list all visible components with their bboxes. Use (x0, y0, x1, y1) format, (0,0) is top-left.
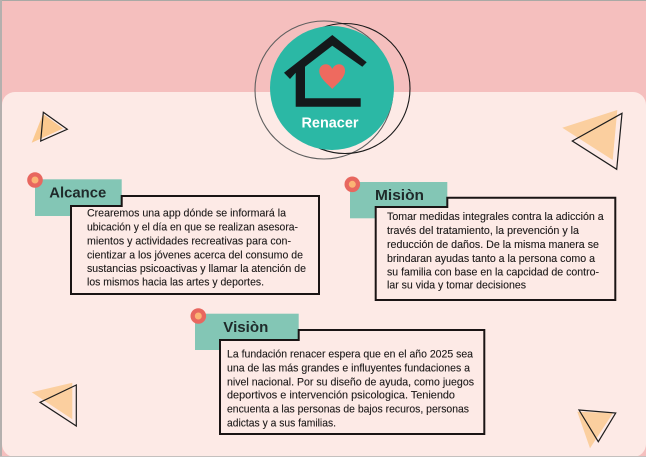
decorative triangle: bottom left (32, 383, 76, 426)
Visiòn body text: adictas y a sus familias. (227, 418, 336, 430)
main content panel (2, 92, 646, 457)
Visiòn text box (220, 330, 484, 434)
Misiòn body text: su familia con base en la capcidad de contro- (387, 266, 599, 278)
decorative triangle: top right (562, 110, 622, 169)
logo black ring (280, 24, 410, 154)
Misiòn body text: través del tratamiento, la prevención y la (387, 225, 580, 237)
Misiòn body text: reducción de daños. De la misma manera se (387, 239, 599, 251)
Visiòn body text: encuenta a las personas de bajos recuros, personas (227, 404, 469, 416)
Alcance heading: Alcance (49, 185, 106, 202)
icon: house (284, 35, 367, 107)
Alcance body text: mientos y actividades recreativas para con- (87, 235, 291, 247)
Misiòn body text (387, 211, 605, 292)
Visiòn body text: una de las más grandes e influyentes fundaciones a (227, 363, 471, 375)
Misiòn heading tab (350, 182, 447, 218)
Alcance body text: ubicación y el día en que se realizan asesora- (87, 222, 298, 234)
icon: heart (319, 64, 345, 89)
panel: Alcance (27, 172, 319, 294)
Visiòn heading: Visiòn (223, 319, 268, 336)
Misiòn body text: brindaran ayudas tanto a la persona como a (387, 253, 596, 265)
Alcance body text: Crearemos una app dónde se informará la (87, 208, 287, 220)
Alcance body text: sustancias psicoactivas y llamar la atención de (87, 263, 306, 275)
Alcance text box (71, 196, 319, 294)
logo name: Renacer (302, 116, 359, 132)
Visiòn marker dot (190, 308, 206, 324)
panel: Visiòn (190, 308, 484, 434)
Misiòn heading: Misiòn (375, 187, 424, 204)
Alcance body text: cientizar a los jóvenes acerca del consumo de (87, 249, 303, 261)
Misiòn body text: Tomar medidas integrales contra la adicción a (387, 211, 605, 223)
Alcance body text: los mismos hacia las artes y deportes. (87, 277, 264, 289)
Visiòn heading tab (195, 314, 299, 350)
logo gray ring (255, 21, 393, 159)
Alcance heading tab (35, 179, 122, 216)
Alcance body text (87, 208, 306, 289)
Misiòn marker dot (344, 176, 360, 192)
decorative triangle: bottom right (577, 410, 616, 448)
panel: Misiòn (344, 176, 615, 300)
Visiòn body text: nivel nacional. Por su diseño de ayuda, como juegos (227, 377, 474, 389)
logo: Renacer (255, 21, 410, 159)
Misiòn body text: lar su vida y tomar decisiones (387, 280, 526, 292)
decorative triangle: top left (32, 112, 67, 143)
Visiòn body text: deportivos e intervención psicologica. Teniendo (227, 390, 455, 402)
Misiòn text box (376, 198, 615, 300)
Visiòn body text: La fundación renacer espera que en el año 2025 sea (227, 348, 474, 360)
logo teal circle (270, 26, 394, 150)
Visiòn body text (227, 348, 474, 430)
Alcance marker dot (27, 172, 43, 188)
